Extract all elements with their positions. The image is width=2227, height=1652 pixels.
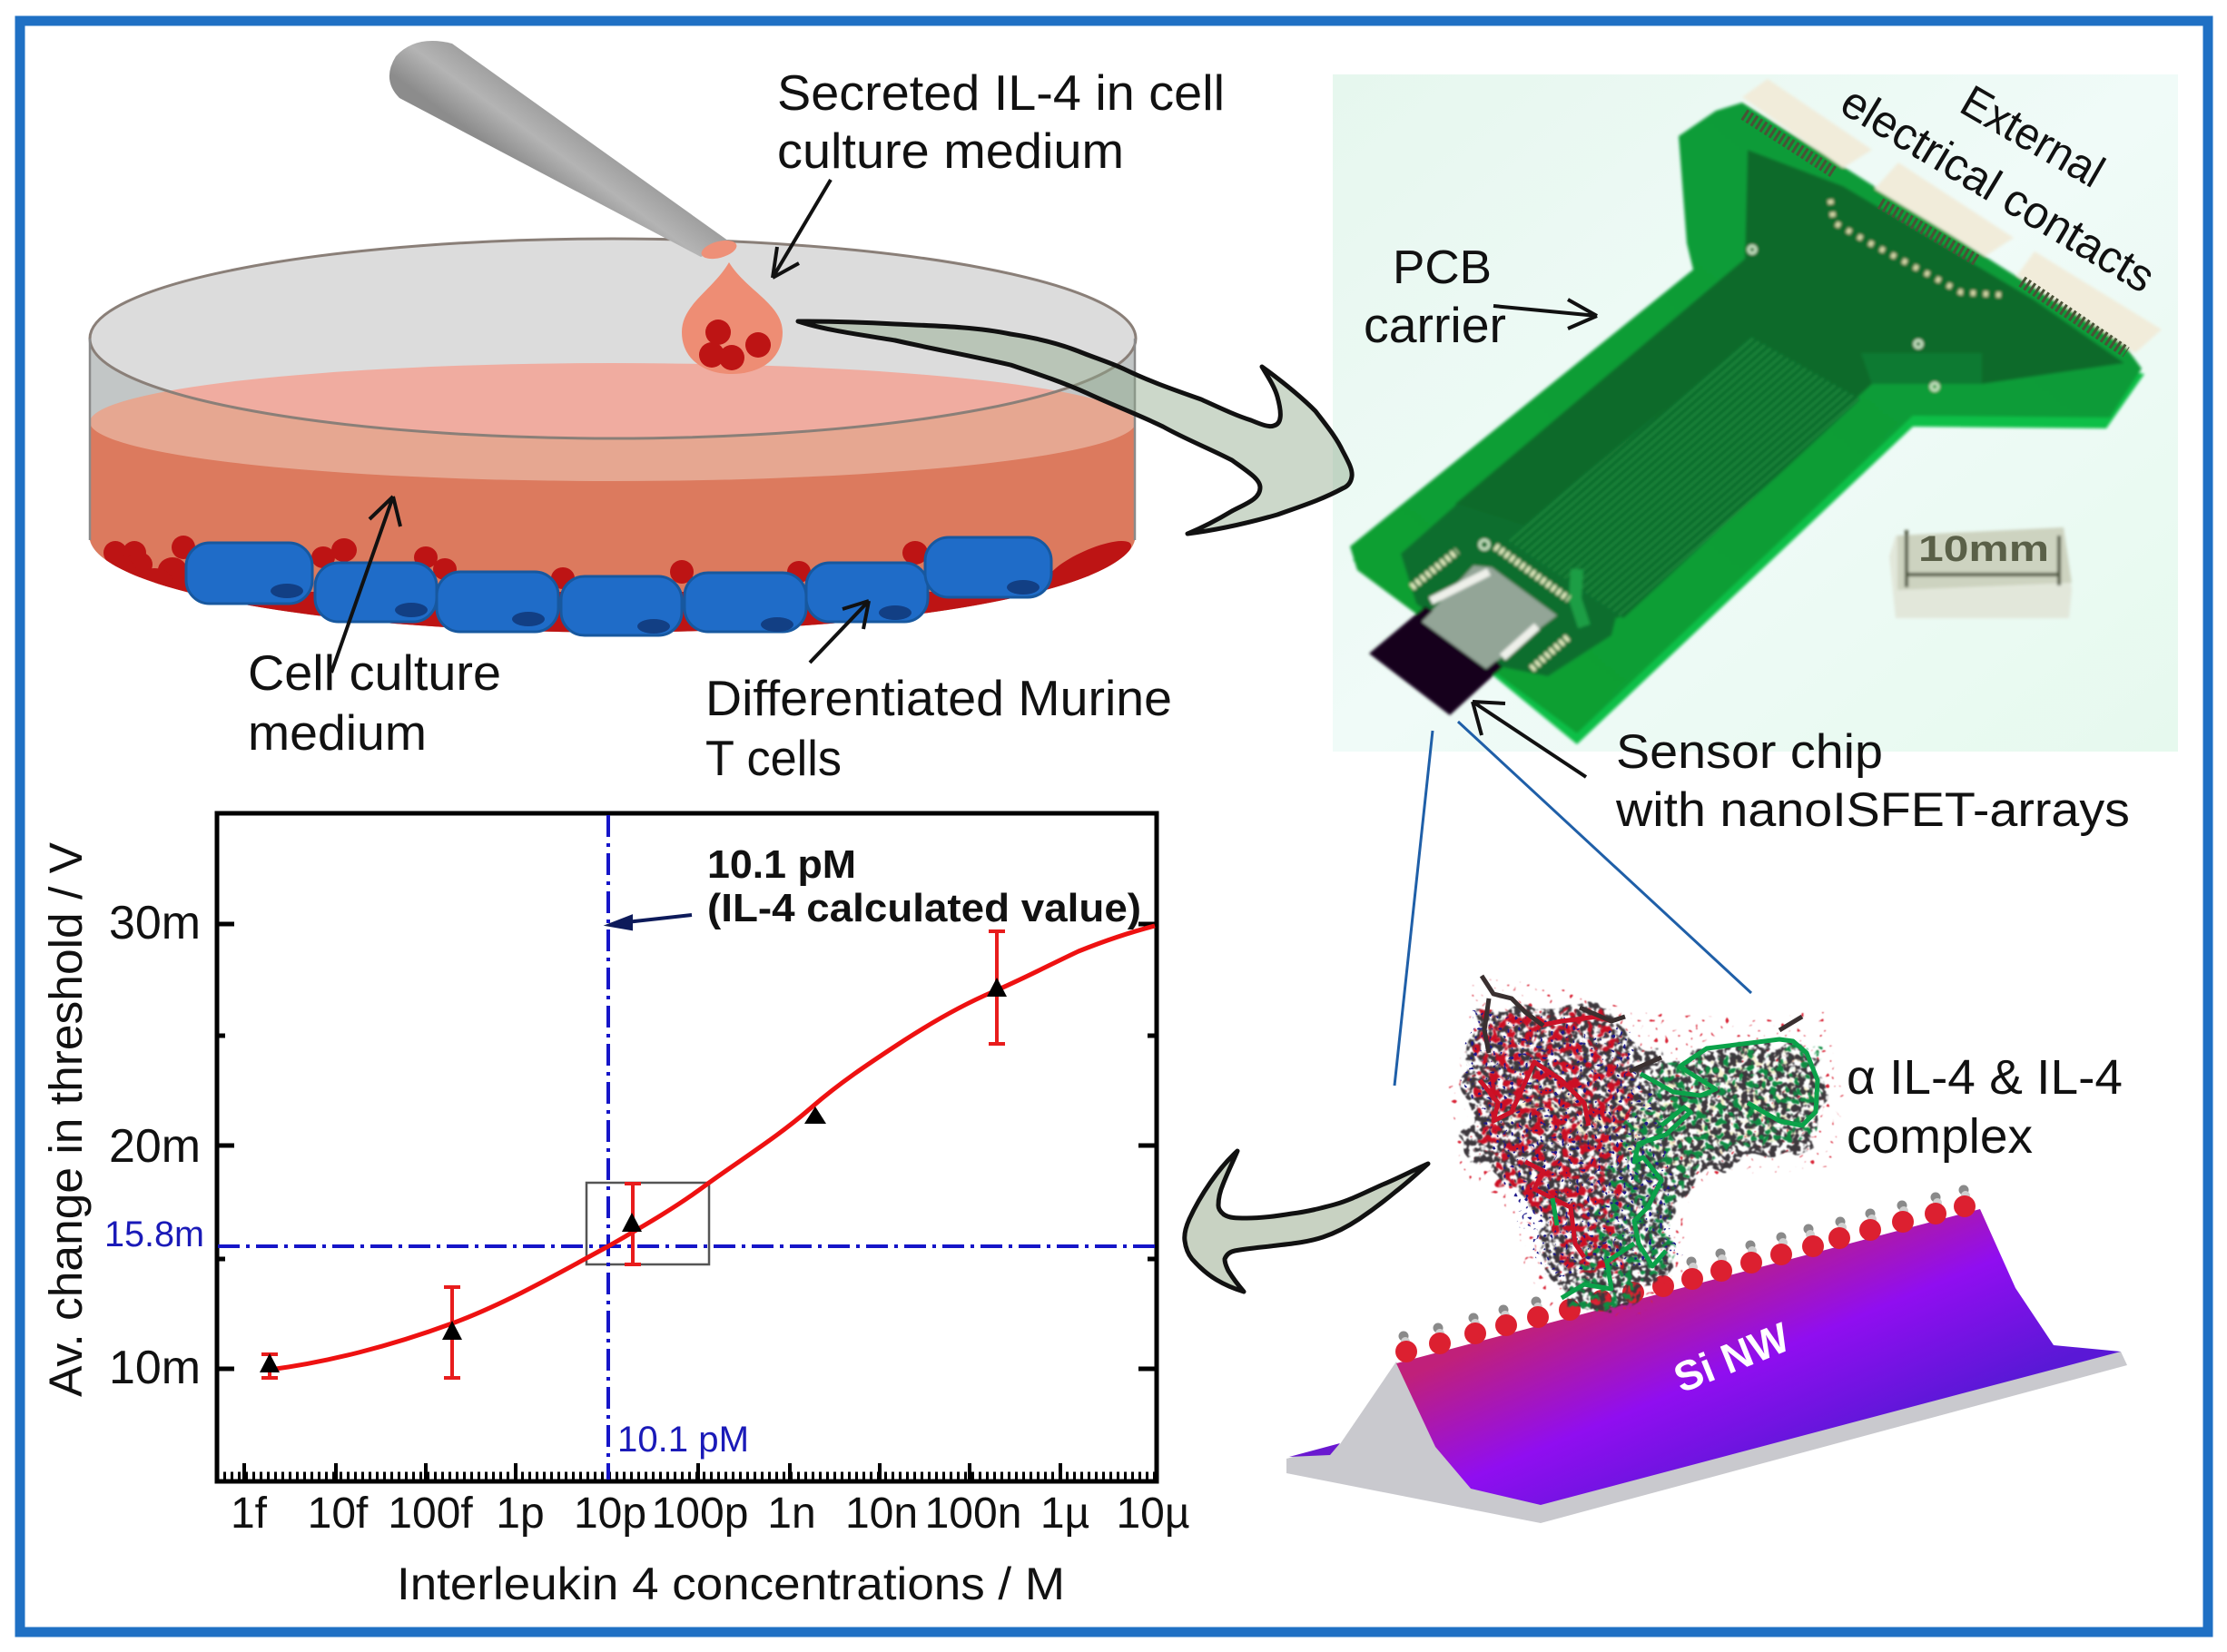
- x axis labels: 10n: [845, 1490, 918, 1538]
- y axis labels: 30m: [109, 897, 201, 949]
- label: external electrical contacts: External: [1952, 75, 2113, 198]
- label: differentiated murine T cells: Differentiated Murine: [705, 670, 1172, 726]
- green chain strands: [1552, 1039, 1818, 1298]
- nanowire label: Si NW: [1667, 1313, 1797, 1401]
- epoxy: [1422, 565, 1557, 669]
- substrate purple sliver: [1289, 1443, 1340, 1457]
- label: external electrical contacts: electrical contacts: [1832, 75, 2163, 302]
- PCB board: [1350, 79, 2162, 744]
- x axis minor ticks: [216, 1472, 1157, 1480]
- medium surface: [90, 363, 1136, 481]
- label: alpha IL-4 and IL-4 complex: complex: [1847, 1109, 2033, 1164]
- IL-4 droplet: [682, 262, 783, 374]
- arrow: to PCB: [1493, 300, 1597, 329]
- callout: IL-4 calculated value: [707, 842, 1141, 930]
- reference value 15.8m: 15.8m: [104, 1214, 204, 1254]
- x axis labels: [231, 1490, 1190, 1538]
- x axis labels: 100f: [388, 1490, 473, 1538]
- signal traces: [1507, 337, 1860, 618]
- connectors: [1742, 79, 2162, 353]
- x axis labels: 1n: [767, 1490, 816, 1538]
- label: differentiated murine T cells: T cells: [705, 730, 842, 786]
- fit curve: [270, 926, 1155, 1370]
- green smear near chip: [1575, 569, 1584, 626]
- molecule: antibody and IL-4 complex: [1448, 976, 1848, 1316]
- dish wall outlines: [90, 339, 1135, 540]
- via chain: [1830, 200, 2002, 295]
- data points: [260, 978, 1007, 1372]
- label: differentiated murine T cells: [705, 670, 1172, 786]
- trace bundle: [1861, 353, 1982, 384]
- y axis labels: 20m: [109, 1120, 201, 1173]
- photo background: [1333, 74, 2178, 752]
- label: secreted IL-4: culture medium: [777, 123, 1124, 179]
- x axis labels: 100n: [925, 1490, 1021, 1538]
- label: alpha IL-4 and IL-4 complex: [1847, 1050, 2123, 1164]
- label: PCB carrier: PCB: [1393, 241, 1492, 294]
- pipette: [389, 41, 739, 262]
- curved arrow: dish to PCB: [798, 321, 1352, 534]
- zoom lines: chip to nanowire: [1394, 722, 1751, 1086]
- x axis labels: 10f: [308, 1490, 369, 1538]
- y axis ticks: [216, 924, 1157, 1369]
- arrow: to sensor chip: [1473, 702, 1586, 777]
- culture medium body: [90, 422, 1135, 633]
- red cell layer: [103, 536, 1131, 632]
- panel: silicon nanowire: [1286, 1209, 2127, 1523]
- copper area: [1455, 150, 2124, 618]
- photo: PCB carrier: [1333, 74, 2178, 752]
- T cells: [186, 537, 1051, 635]
- arrow: to T cells: [810, 601, 869, 663]
- y axis title: Av. change in threshold / V: [40, 842, 92, 1397]
- structure: green chain: [1566, 1044, 1820, 1307]
- callout: IL-4 calculated value: (IL-4 calculated value): [707, 886, 1141, 930]
- x axis labels: 1µ: [1040, 1490, 1089, 1538]
- droplet cells: [699, 320, 771, 370]
- reference lines: [218, 815, 1155, 1480]
- dish side wall: [90, 339, 1135, 633]
- nanowire face: [1396, 1209, 2121, 1505]
- x axis labels: 1f: [231, 1490, 268, 1538]
- x axis labels: 1p: [496, 1490, 545, 1538]
- label: secreted IL-4: [777, 64, 1225, 179]
- y axis labels: [109, 897, 201, 1394]
- arrow: to droplet: [773, 180, 831, 278]
- sensor chip: [1369, 606, 1503, 715]
- connector pins: [1744, 114, 2126, 352]
- board edge shadow: [1353, 363, 2144, 744]
- panel: petri dish with cell culture: [90, 239, 1136, 646]
- T cell nuclei: [271, 580, 1040, 634]
- scale block: [1889, 527, 2072, 618]
- x axis title: Interleukin 4 concentrations / M: [397, 1559, 1065, 1609]
- y axis labels: 10m: [109, 1342, 201, 1394]
- dark chain strands: [1482, 976, 1802, 1071]
- label: cell culture medium: [248, 644, 501, 761]
- structure: cream atoms: [1507, 1044, 1816, 1175]
- label: sensor chip: [1615, 725, 2130, 837]
- substrate: [1286, 1352, 2127, 1523]
- label: PCB carrier: [1364, 241, 1506, 353]
- structure: blue atoms: [1463, 1008, 1675, 1280]
- surface groups on nanowire: [1395, 1185, 1976, 1362]
- x axis labels: 10p: [574, 1490, 646, 1538]
- callout: IL-4 calculated value: 10.1 pM: [707, 842, 856, 887]
- structure: red chain: [1469, 1008, 1634, 1280]
- curved arrow: nanowire to chart: [1185, 1151, 1428, 1292]
- scattered atoms: [1448, 976, 1848, 1316]
- plot frame: [217, 813, 1157, 1481]
- dish rim outline: [90, 239, 1136, 438]
- reference value 10.1 pM: 10.1 pM: [617, 1420, 749, 1460]
- pipette tip opening: [699, 237, 739, 262]
- scale text: 10mm: [1918, 529, 2049, 569]
- epoxy highlight top: [1431, 572, 1489, 601]
- x axis ticks: [244, 1463, 1060, 1481]
- label: cell culture medium: Cell culture: [248, 644, 501, 701]
- label: alpha IL-4 and IL-4 complex: α IL-4 & IL-4: [1847, 1050, 2123, 1105]
- chart: threshold change vs IL-4 concentration: [40, 813, 1190, 1609]
- IC pads: [1412, 546, 1569, 669]
- x axis labels: 100p: [652, 1490, 748, 1538]
- label: PCB carrier: carrier: [1364, 297, 1506, 353]
- label: cell culture medium: medium: [248, 704, 427, 761]
- label: sensor chip: with nanoISFET-arrays: [1615, 783, 2130, 837]
- label: secreted IL-4: Secreted IL-4 in cell: [777, 64, 1225, 121]
- board body: [1350, 103, 2142, 733]
- callout arrow: [610, 915, 692, 929]
- x axis labels: 10µ: [1116, 1490, 1190, 1538]
- structure: dark bonds: [1462, 1008, 1825, 1305]
- red chain strands: [1480, 1017, 1611, 1257]
- reference box: [586, 1183, 709, 1264]
- label: sensor chip: Sensor chip: [1616, 725, 1883, 779]
- arrow: to medium: [331, 497, 400, 673]
- chip zone copper: [1401, 504, 1625, 676]
- error bars: [261, 931, 1005, 1378]
- epoxy highlight bottom: [1503, 626, 1537, 657]
- medium surface seen through rim: [171, 363, 1055, 438]
- via pads: [1480, 246, 1938, 549]
- dish rim interior: [90, 239, 1136, 438]
